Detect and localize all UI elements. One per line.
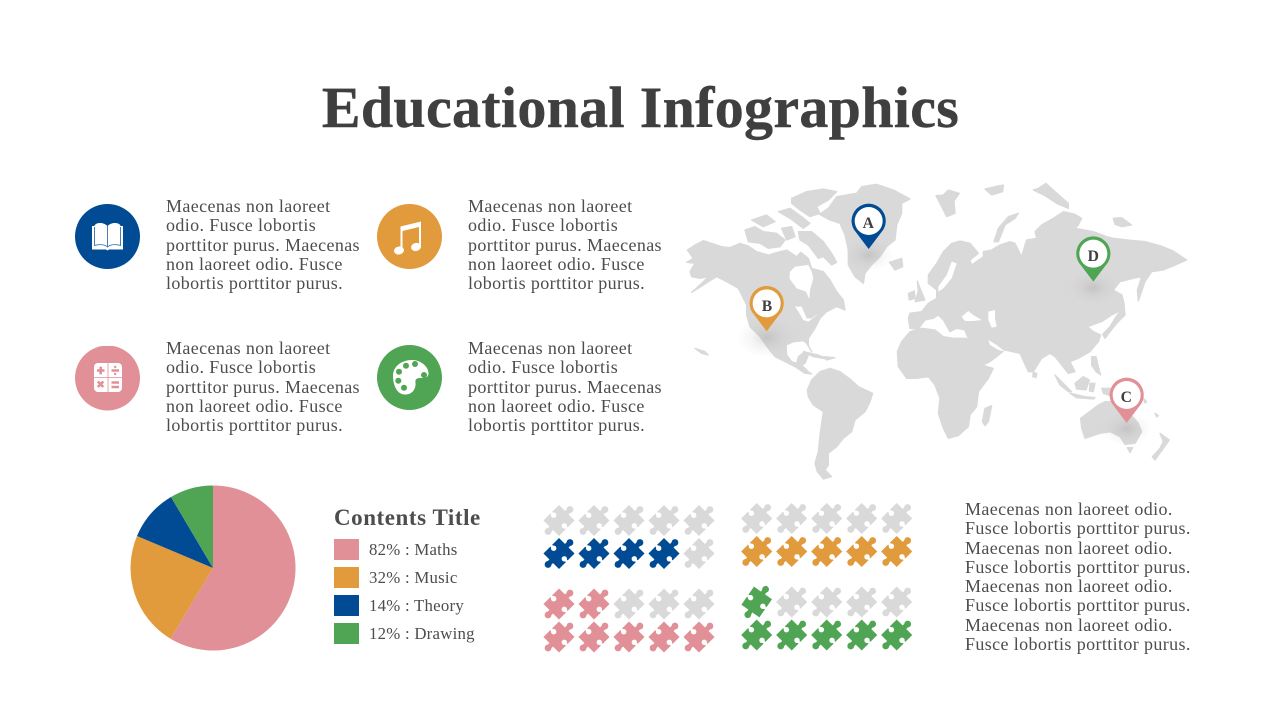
South America	[807, 368, 873, 479]
text block: palette: lobortis porttitor purus.	[468, 415, 645, 435]
icon: calculator	[75, 346, 140, 410]
pin D: D	[1088, 248, 1099, 265]
slice: theory	[137, 497, 213, 568]
pin B: B	[762, 298, 772, 315]
text block: palette: odio. Fusce lobortis	[468, 357, 618, 377]
text block: music: odio. Fusce lobortis	[468, 215, 618, 235]
inland seas	[789, 262, 1005, 352]
text block: palette: Maecenas non laoreet	[468, 338, 633, 358]
text block: book: lobortis porttitor purus.	[166, 273, 343, 293]
text block: book: non laoreet odio. Fusce	[166, 254, 343, 274]
text block: right column	[965, 499, 1191, 654]
Arctic islands	[745, 189, 837, 265]
Eurasia	[908, 212, 1187, 373]
text block: right column: Maecenas non laoreet odio.	[965, 538, 1173, 558]
puzzle pictograms	[544, 503, 912, 652]
text block: palette	[468, 338, 662, 435]
slice: drawing	[171, 486, 213, 568]
legend swatch: drawing	[334, 623, 359, 644]
pin A	[852, 204, 886, 249]
Iceland	[889, 258, 903, 270]
text block: calculator: lobortis porttitor purus.	[166, 415, 343, 435]
Tasmania and New Zealand	[1127, 398, 1169, 460]
puzzle group: blue, 4 of 10	[537, 499, 721, 575]
text block: right column: Fusce lobortis porttitor purus.	[965, 634, 1191, 654]
pin D	[1076, 236, 1110, 282]
pin C: C	[1121, 389, 1132, 406]
icon: book	[75, 204, 140, 269]
text block: right column: Fusce lobortis porttitor purus.	[965, 595, 1191, 615]
map: landmasses	[687, 183, 1187, 479]
legend swatch: maths	[334, 539, 359, 560]
legend label: music: 32% : Music	[369, 568, 458, 587]
text block: music: lobortis porttitor purus.	[468, 273, 645, 293]
text block: book: Maecenas non laoreet	[166, 196, 331, 216]
pin A: A	[863, 215, 875, 232]
text block: book: porttitor purus. Maecenas	[166, 234, 360, 254]
legend label: theory: 14% : Theory	[369, 596, 464, 615]
text block: palette: non laoreet odio. Fusce	[468, 396, 645, 416]
puzzle group: pink, 7 of 10	[537, 582, 721, 659]
legend swatch: music	[334, 567, 359, 588]
text block: music: Maecenas non laoreet	[468, 196, 633, 216]
Japan	[1103, 294, 1125, 338]
title: Educational Infographics	[322, 75, 959, 140]
text block: music: non laoreet odio. Fusce	[468, 254, 645, 274]
Caribbean and Hawaii	[695, 348, 835, 360]
United Kingdom and Ireland	[908, 281, 925, 302]
text block: book: odio. Fusce lobortis	[166, 215, 316, 235]
slice: music	[131, 536, 213, 639]
legend title: Contents Title	[334, 505, 481, 530]
pin B	[750, 286, 784, 331]
Madagascar	[982, 406, 992, 426]
text block: right column: Fusce lobortis porttitor purus.	[965, 557, 1191, 577]
pin shadows	[737, 238, 1152, 446]
text block: palette: porttitor purus. Maecenas	[468, 376, 662, 396]
Greenland	[819, 184, 910, 283]
world map with pins	[686, 182, 1188, 480]
icon: palette	[377, 345, 442, 410]
text block: right column: Fusce lobortis porttitor purus.	[965, 518, 1191, 538]
Australia	[1081, 402, 1142, 444]
puzzle group: orange, 5 of 10	[735, 497, 919, 573]
slice: maths	[170, 486, 296, 650]
Southeast Asia	[1033, 357, 1123, 399]
legend label: maths: 82% : Maths	[369, 540, 458, 559]
Arctic Ocean islands	[936, 183, 1132, 242]
text block: calculator: non laoreet odio. Fusce	[166, 396, 343, 416]
text block: book	[166, 196, 360, 293]
North America	[687, 241, 845, 374]
text block: calculator: Maecenas non laoreet	[166, 338, 331, 358]
text block: right column: Maecenas non laoreet odio.	[965, 499, 1173, 519]
text block: music	[468, 196, 662, 293]
legend label: drawing: 12% : Drawing	[369, 624, 475, 643]
pin C	[1110, 378, 1144, 423]
Africa	[897, 328, 993, 438]
text block: right column: Maecenas non laoreet odio.	[965, 576, 1173, 596]
legend swatch: theory	[334, 595, 359, 616]
text block: calculator: porttitor purus. Maecenas	[166, 376, 360, 396]
icon: music note	[377, 204, 442, 269]
puzzle group: green, 6 of 10	[735, 580, 919, 657]
text block: right column: Maecenas non laoreet odio.	[965, 614, 1173, 634]
text block: music: porttitor purus. Maecenas	[468, 234, 662, 254]
text block: calculator: odio. Fusce lobortis	[166, 357, 316, 377]
pie chart	[130, 486, 296, 650]
text block: calculator	[166, 338, 360, 435]
